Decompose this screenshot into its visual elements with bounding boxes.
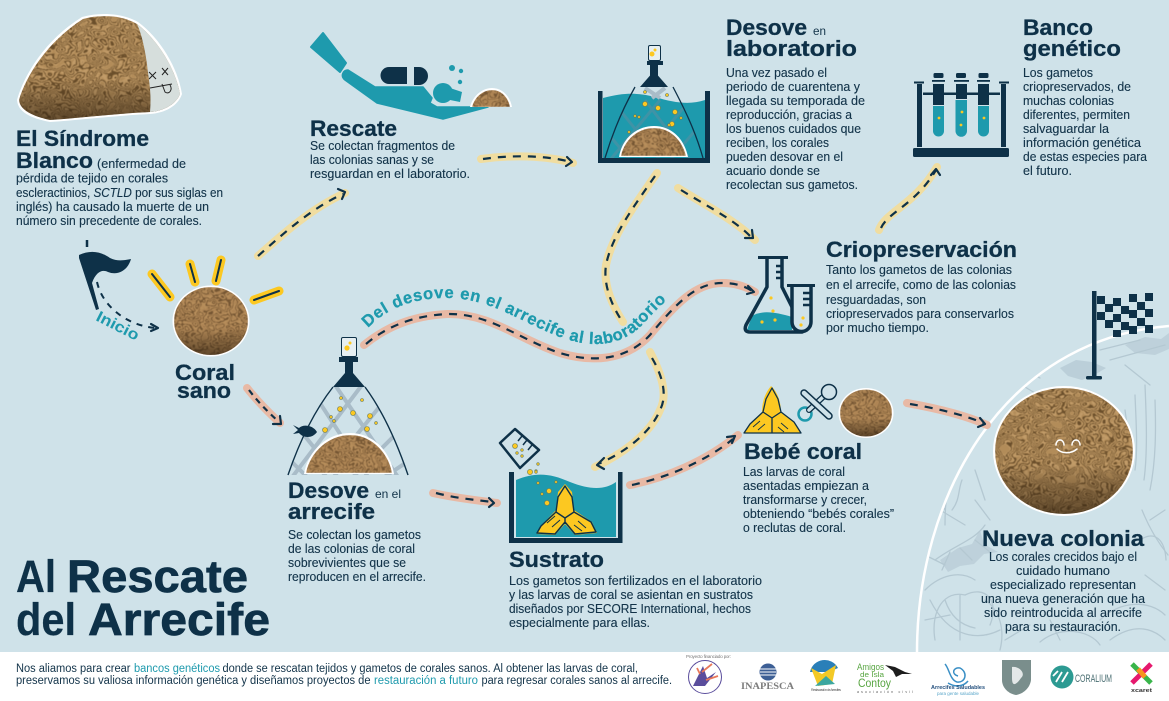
text: new colony description: especializado representan [990, 578, 1136, 592]
text: lab spawning description: acuario donde se [726, 164, 820, 178]
logo: INAPESCA [741, 664, 795, 691]
text: baby coral description: obteniendo “bebés corales” [743, 507, 894, 521]
arrow: cryopreservation to gene bank [879, 167, 940, 230]
panel: start and healthy coral [79, 240, 279, 403]
heading: Desove en el arrecife: Desove [288, 478, 369, 503]
text: new colony description: para su restauración. [1005, 620, 1121, 634]
text: lab spawning description: reproducción, gracias a [726, 108, 852, 122]
arrow: rescue to lab spawning [481, 156, 573, 166]
text: reef spawning description [288, 528, 426, 584]
logo: Amigos de Isla Contoy: de Isla [860, 672, 884, 679]
footer text: donde se rescatan tejidos y gametos de corales sanos. Al obtener las larvas de coral, [222, 663, 638, 675]
footer text: restauración a futuro [374, 675, 478, 687]
heading: Criopreservación: Criopreservación [826, 237, 1017, 262]
text: lab spawning description: los buenos cuidados que [726, 122, 861, 136]
illustration: reef sketch [925, 333, 1169, 650]
panel: lab spawning [598, 15, 865, 192]
logo: Xcaret [1131, 664, 1152, 694]
heading: Bebé coral: Bebé coral [744, 439, 862, 464]
icon: checkered flag [1086, 291, 1153, 380]
text: rescue description: las colonias sanas y se [310, 153, 434, 167]
icon: collection net over coral [288, 338, 410, 480]
label: curved reef to lab text: Del desove en el arrecife al laboratorio [360, 289, 665, 344]
icon: healthy coral [172, 286, 250, 356]
text: substrate description: y las larvas de coral se asientan en sustratos [509, 588, 753, 602]
heading: El Síndrome Blanco [16, 126, 149, 173]
icon: test tube rack [913, 73, 1009, 157]
arrow: reef spawning to lab line [364, 283, 755, 358]
heading: Desove en el arrecife: arrecife [288, 499, 375, 524]
text: sick coral description: inglés) ha causado la muerte de un [16, 200, 209, 214]
heading: Coral sano [175, 360, 235, 403]
heading: Desove en el arrecife [288, 478, 401, 524]
text: gene bank description: Los gametos [1023, 66, 1093, 80]
panel: new colony backdrop [917, 326, 1169, 652]
text: sick coral description [16, 157, 223, 228]
text: cryopreservation description: en el arrecife, como de las colonias [826, 278, 1016, 292]
heading: Coral sano: Coral [175, 360, 235, 385]
heading: Desove en el arrecife: en el [375, 487, 401, 501]
logo: Arrecifes Saludables [931, 664, 985, 696]
text: baby coral description: asentadas empiezan a [743, 479, 869, 493]
heading: Banco genético: Banco [1023, 15, 1093, 40]
logo: INAPESCA: INAPESCA [741, 681, 795, 691]
text: baby coral description: Las larvas de coral [743, 465, 845, 479]
text: cryopreservation description: criopreservados para conservarlos [826, 307, 1014, 321]
heading: Desove en laboratorio: Desove [726, 15, 807, 40]
panel: sick coral [16, 14, 223, 228]
text: gene bank description: criopreservados, de [1023, 80, 1131, 94]
text: gene bank description [1023, 66, 1147, 178]
arrow: coral to reef spawning [247, 388, 281, 424]
text: lab spawning description: llegada su temporada de [726, 94, 865, 108]
panel: gene bank [913, 15, 1147, 178]
icon: baby coral photo [838, 388, 894, 438]
icon: new coral colony [993, 386, 1135, 516]
heading: Banco genético [1023, 15, 1121, 61]
arrow: baby coral to new colony [907, 403, 987, 427]
icon: lab tank with coral [598, 46, 710, 163]
logo: Coralium [1050, 666, 1112, 688]
text: gene bank description: de estas especies para [1023, 150, 1147, 164]
panel: baby coral [743, 384, 894, 535]
text: gene bank description: diferentes, permiten [1023, 108, 1130, 122]
text: new colony description: una nueva generación que ha [981, 592, 1145, 606]
text: substrate description: Los gametos son fertilizados en el laboratorio [509, 574, 762, 588]
logo: reef restoration: Restauración de Arrecifes [811, 688, 841, 692]
logo: Xcaret: xcaret [1131, 688, 1152, 694]
text: cryopreservation description: Tanto los gametos de las colonias [826, 263, 1012, 277]
text: gene bank description: el futuro. [1023, 164, 1072, 178]
text: lab spawning description: recolectan sus gametos. [726, 178, 858, 192]
logo: Arrecifes Saludables: Arrecifes Saludables [931, 685, 985, 691]
footer band [0, 652, 1169, 701]
heading: Sustrato: Sustrato [509, 547, 604, 572]
logo: Coralium: CORALIUM [1075, 673, 1112, 685]
arc: white circle edge [917, 326, 1169, 652]
text: sick coral description: escleractinios, SCTLD por sus siglas en [16, 186, 223, 200]
text: gene bank description: información genética [1023, 136, 1141, 150]
icon: shine rays [152, 260, 279, 300]
text: lab spawning description: reciben, los corales [726, 136, 829, 150]
text: lab spawning description [726, 66, 865, 192]
label: Inicio: Inicio [93, 308, 142, 344]
text: sick coral description: pérdida de tejido en corales [16, 172, 168, 186]
text: new colony description: sido reintroducida al arrecife [984, 606, 1142, 620]
icon: small substrate [744, 386, 801, 433]
icon: white syndrome coral [17, 14, 182, 122]
heading: Desove en laboratorio: laboratorio [726, 36, 857, 61]
panel: reef spawning [288, 338, 426, 584]
text: new colony description: cuidado humano [1016, 564, 1110, 578]
arrow: coral to rescue [258, 189, 345, 256]
text: reef spawning description: Se colectan los gametos [288, 528, 421, 542]
icon: fish [293, 425, 317, 437]
text: sick coral description: (enfermedad de [97, 157, 186, 171]
logo: Amigos de Isla Contoy: asociación civil [857, 690, 913, 694]
icon: pacifier [798, 384, 836, 420]
icon: start flag [79, 240, 131, 310]
text: gene bank description: muchas colonias [1023, 94, 1114, 108]
heading: El Síndrome Blanco: Blanco [16, 148, 93, 173]
footer text: preservamos su valiosa información genética y diseñamos proyectos de [16, 675, 370, 687]
heading: Nueva colonia: Nueva colonia [982, 526, 1145, 551]
icon: diver [311, 33, 512, 119]
title: Rescate [67, 551, 248, 602]
heading: El Síndrome Blanco: El Síndrome [16, 126, 149, 151]
logo: Arrecifes Saludables: para gente saludable [937, 691, 979, 696]
text: cryopreservation description [826, 263, 1016, 335]
arrows: pink reef path [247, 283, 987, 507]
arrow: lab spawning to cryopreservation [678, 188, 755, 240]
arrow: substrate to baby coral [630, 435, 738, 485]
panel: substrate [500, 429, 762, 630]
logo: circular coral emblem [688, 660, 722, 694]
text: rescue description: Se colectan fragmentos de [310, 139, 455, 153]
icon: flasks [745, 256, 815, 332]
title [16, 551, 270, 645]
panel: new colony [981, 291, 1153, 634]
text: sick coral description: número sin precedente de corales. [16, 214, 202, 228]
title: del [16, 594, 76, 645]
text: substrate description: diseñados por SECORE International, hechos [509, 602, 751, 616]
text: lab spawning description: Una vez pasado el [726, 66, 827, 80]
text: new colony description [981, 550, 1145, 634]
text: baby coral description: transformarse y crecer, [743, 493, 867, 507]
panel: rescue [310, 33, 512, 181]
text: lab spawning description: periodo de cuarentena y [726, 80, 861, 94]
heading: Coral sano: sano [177, 378, 231, 403]
title: Al [16, 551, 56, 602]
icon: tank with substrate [500, 429, 622, 543]
text: substrate description: especialmente para ellas. [509, 616, 650, 630]
heading: Rescate: Rescate [310, 116, 397, 141]
text: baby coral description: o reclutas de coral. [743, 521, 846, 535]
text: funded by: Proyecto financiado por: [686, 654, 731, 659]
text: gene bank description: salvaguardar la [1023, 122, 1109, 136]
arrow: lab spawning down [605, 173, 657, 322]
text: baby coral description [743, 465, 894, 535]
footer text [16, 663, 672, 687]
text: rescue description [310, 139, 470, 181]
text: rescue description: resguardan en el laboratorio. [310, 167, 470, 181]
arrow: to substrate [595, 352, 664, 469]
heading: Desove en laboratorio: en [813, 24, 826, 38]
text: lab spawning description: pueden desovar en el [726, 150, 843, 164]
arrow: start dashed [97, 282, 158, 331]
logo: reef restoration [810, 660, 841, 692]
panel: sponsor logos [686, 654, 1152, 696]
text: reef spawning description: de las colonias de coral [288, 542, 415, 556]
heading: Banco genético: genético [1023, 36, 1121, 61]
text: reef spawning description: reproducen en el arrecife. [288, 570, 426, 584]
panel: cryopreservation [745, 237, 1017, 335]
text: new colony description: Los corales crecidos bajo el [989, 550, 1137, 564]
text: substrate description [509, 574, 762, 630]
footer text: bancos genéticos [134, 663, 220, 675]
logo: Amigos de Isla Contoy: Contoy [858, 676, 891, 690]
logo: Amigos de Isla Contoy [857, 662, 913, 694]
footer text: para regresar corales sanos al arrecife. [482, 675, 672, 687]
text: cryopreservation description: resguardadas, son [826, 293, 926, 307]
text: reef spawning description: sobrevivientes que se [288, 556, 406, 570]
heading: Desove en laboratorio [726, 15, 857, 61]
title: Arrecife [88, 594, 270, 645]
logo: Amigos de Isla Contoy: Amigos [857, 662, 884, 672]
logo: UNAM shield [1002, 660, 1031, 695]
arrow: reef spawning to substrate [433, 493, 497, 507]
text: cryopreservation description: por mucho tiempo. [826, 321, 929, 335]
arrows: yellow lab path [258, 156, 940, 469]
footer text: Nos aliamos para crear [16, 663, 131, 675]
